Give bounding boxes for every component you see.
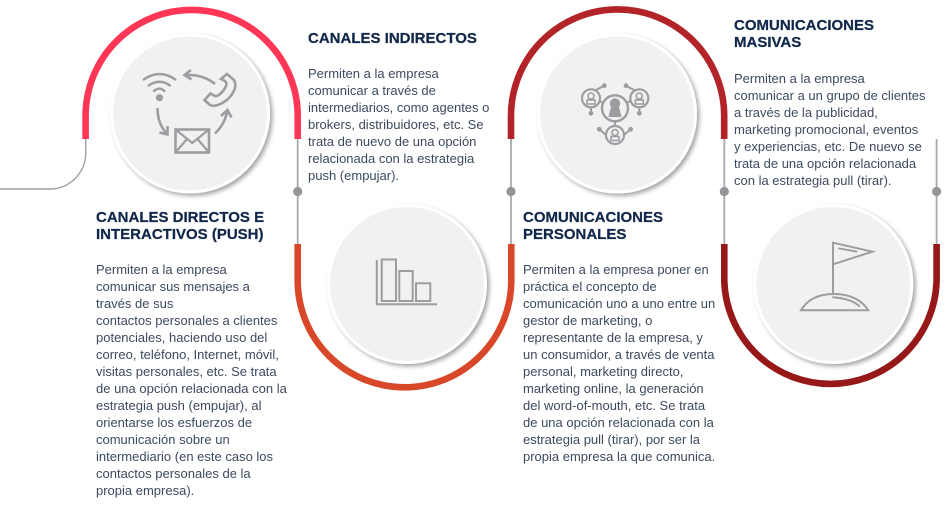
circle: icon background [538, 35, 696, 192]
body: canales directos: propia empresa). [96, 483, 194, 498]
body: canales indirectos: comunicar a través de [308, 83, 436, 98]
circle: icon background [755, 206, 912, 362]
body: canales directos: orientarse los esfuerzos de [96, 415, 252, 430]
body: canales directos: intermediario (en este caso los [96, 449, 273, 464]
body: comunicaciones personales: representante de la empresa, y [523, 330, 703, 345]
body: canales indirectos: intermediarios, como agentes o [308, 100, 489, 115]
body: comunicaciones personales: estrategia pull (tirar), por ser la [523, 432, 700, 447]
arc: red top arch [511, 9, 724, 139]
body: comunicaciones masivas: con la estrategia pull (tirar). [734, 172, 892, 188]
text block: canales indirectos [308, 30, 489, 183]
body: canales directos: contactos personales a clientes [96, 313, 277, 328]
body: canales indirectos: brokers, distribuidores, etc. Se [308, 117, 484, 132]
heading: canales directos [96, 209, 264, 243]
heading: canales indirectos: CANALES INDIRECTOS [308, 30, 477, 47]
body: canales indirectos: push (empujar). [308, 168, 399, 183]
body: comunicaciones masivas: a través de la publicidad, [734, 104, 878, 120]
arc: coral top arch [86, 10, 298, 139]
body: comunicaciones personales: del word-of-mouth, etc. Se trata [523, 398, 705, 413]
body: canales directos: Permiten a la empresa [96, 262, 227, 277]
icon: connected people network [582, 83, 648, 144]
icon: bar chart [377, 260, 437, 304]
heading: canales directos: INTERACTIVOS (PUSH) [96, 226, 264, 243]
heading: comunicaciones masivas: MASIVAS [734, 34, 801, 51]
body: comunicaciones masivas: Permiten a la empresa [734, 70, 865, 86]
arc: dark red bottom arch [724, 244, 937, 384]
body: canales directos: comunicar sus mensajes a [96, 279, 250, 294]
body: comunicaciones personales [523, 262, 715, 464]
text block: comunicaciones masivas [734, 17, 926, 188]
text block: canales directos e interactivos [96, 209, 287, 498]
connector: line with node 1 [293, 139, 302, 244]
body: canales indirectos [308, 66, 489, 183]
body: canales indirectos: trata de nuevo de una opción [308, 134, 476, 149]
body: canales indirectos: relacionada con la estrategia [308, 151, 474, 166]
arc: orange bottom arch [298, 244, 511, 387]
body: canales directos [96, 262, 287, 498]
heading: comunicaciones personales [523, 209, 663, 243]
body: comunicaciones masivas: comunicar a un grupo de clientes [734, 88, 926, 102]
panel: comunicaciones personales graphic [511, 9, 724, 192]
body: comunicaciones personales: gestor de marketing, o [523, 313, 652, 328]
heading: canales directos: CANALES DIRECTOS E [96, 209, 264, 226]
connector: line with node 3 [720, 139, 729, 244]
heading: comunicaciones masivas [734, 17, 874, 51]
heading: comunicaciones personales: COMUNICACIONES [523, 209, 663, 226]
connector: line with node 2 [506, 139, 516, 244]
heading: comunicaciones masivas: COMUNICACIONES [734, 17, 874, 34]
icon: flag on mound [801, 242, 872, 310]
panel: canales indirectos graphic [298, 206, 511, 387]
icon: wifi, phone and envelope cycle [143, 70, 235, 152]
body: canales indirectos: Permiten a la empresa [308, 66, 439, 81]
body: comunicaciones masivas: y experiencias, etc. De nuevo se [734, 138, 922, 154]
body: canales directos: correo, teléfono, Internet, móvil, [96, 347, 279, 362]
body: canales directos: potenciales, haciendo uso del [96, 330, 267, 345]
body: comunicaciones masivas: trata de una opción relacionada [734, 156, 916, 170]
body: comunicaciones personales: comunicación uno a uno entre un [523, 296, 715, 311]
body: canales directos: contactos personales de la [96, 466, 251, 481]
body: comunicaciones personales: un consumidor, a través de venta [523, 347, 715, 362]
body: canales directos: estrategia push (empujar), al [96, 398, 261, 413]
body: comunicaciones personales: propia empresa la que comunica. [523, 449, 715, 464]
body: comunicaciones personales: de una opción relacionada con la [523, 415, 714, 430]
circle: icon background [328, 206, 486, 362]
body: canales directos: través de sus [96, 296, 173, 311]
heading: comunicaciones personales: PERSONALES [523, 226, 626, 243]
body: comunicaciones personales: práctica el concepto de [523, 279, 657, 294]
body: canales directos: visitas personales, etc. Se trata [96, 364, 277, 379]
body: comunicaciones masivas: marketing promocional, eventos [734, 122, 918, 136]
body: comunicaciones personales: personal, marketing directo, [523, 364, 683, 379]
panel: comunicaciones masivas graphic [724, 206, 937, 384]
body: comunicaciones personales: marketing online, la generación [523, 381, 704, 396]
connector: line with node 4 [932, 139, 941, 244]
connector: left entry line [0, 139, 86, 189]
body: comunicaciones personales: Permiten a la empresa poner en [523, 262, 709, 277]
panel: canales directos graphic [86, 10, 298, 192]
body: comunicaciones masivas [734, 70, 926, 188]
text block: comunicaciones personales [523, 209, 715, 464]
circle: icon background [112, 35, 268, 192]
body: canales directos: comunicación sobre un [96, 432, 230, 447]
body: canales directos: de una opción relacionada con la [96, 381, 287, 396]
